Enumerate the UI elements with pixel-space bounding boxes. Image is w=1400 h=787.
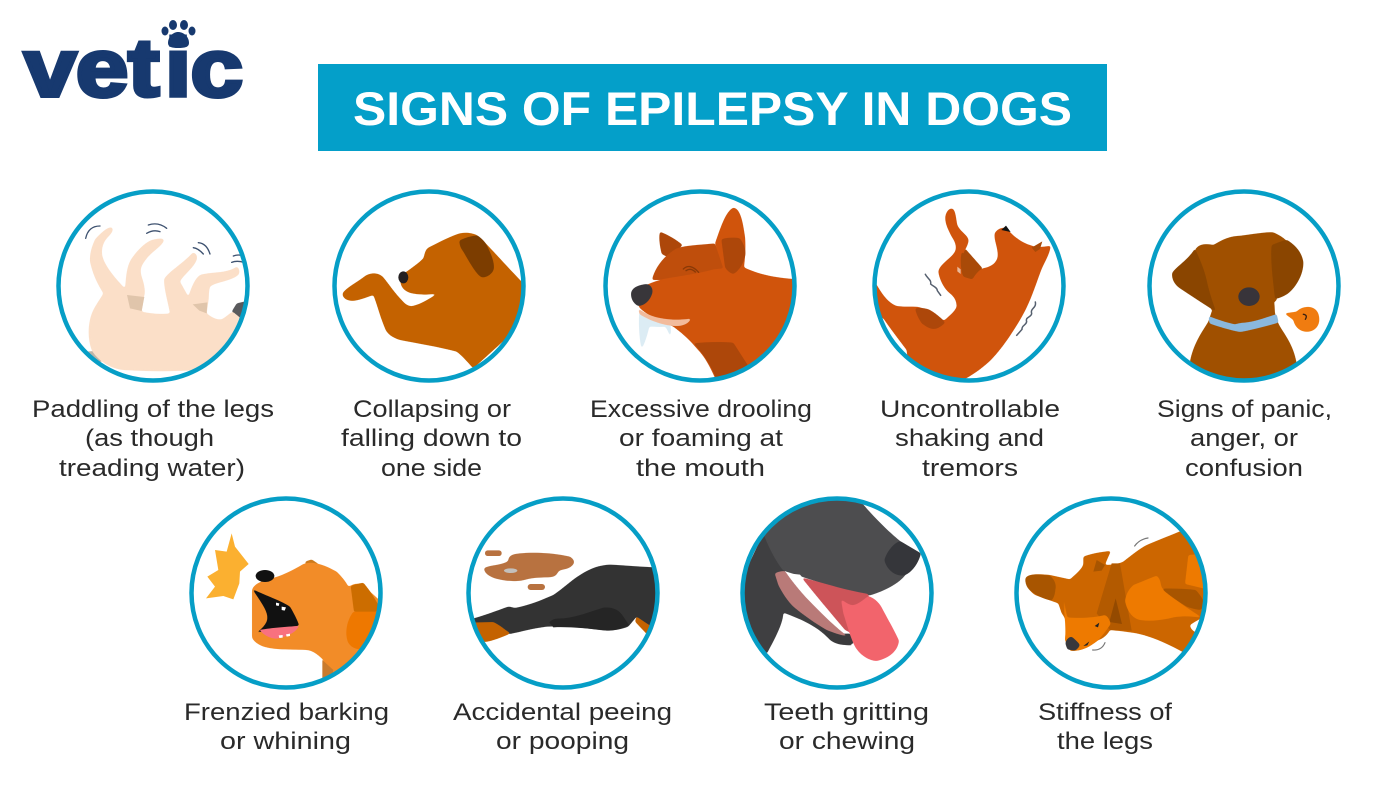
icon: barking dog xyxy=(206,533,387,687)
ring xyxy=(1016,498,1206,688)
caption: falling down to xyxy=(341,425,522,452)
title banner xyxy=(318,64,1107,151)
caption: confusion xyxy=(1185,455,1303,482)
panel: drooling xyxy=(590,192,812,482)
icon: stiff dog lying down xyxy=(1025,531,1210,652)
icon: dog with tongue out xyxy=(737,498,921,661)
caption: Collapsing or xyxy=(353,396,511,423)
caption xyxy=(590,396,812,482)
caption: (as though xyxy=(85,425,214,452)
caption: the legs xyxy=(1057,728,1153,755)
caption xyxy=(341,396,522,482)
caption: one side xyxy=(381,455,482,482)
ring xyxy=(874,192,1064,380)
caption: anger, or xyxy=(1190,425,1298,452)
caption: Frenzied barking xyxy=(184,699,389,726)
caption: tremors xyxy=(922,455,1018,482)
icon: collapsing dog xyxy=(343,233,527,368)
caption: Teeth gritting xyxy=(764,699,929,726)
icon: confused dog with speech bubble xyxy=(1172,232,1319,387)
panel: teeth gritting xyxy=(737,498,932,755)
caption: treading water) xyxy=(59,455,245,482)
ring xyxy=(1150,192,1338,380)
caption: Excessive drooling xyxy=(590,396,812,423)
caption: Signs of panic, xyxy=(1157,396,1332,423)
ring xyxy=(742,498,932,688)
caption xyxy=(1157,396,1332,482)
caption: shaking and xyxy=(895,425,1044,452)
ring xyxy=(58,192,248,380)
ring xyxy=(468,498,658,688)
caption xyxy=(1038,699,1172,755)
caption: Paddling of the legs xyxy=(32,396,274,423)
caption: or whining xyxy=(220,728,351,755)
panel: panic, anger, confusion xyxy=(1150,192,1338,482)
panel: accidental peeing or pooping xyxy=(453,498,672,755)
logo: vetic: vetic xyxy=(24,22,243,114)
panel: collapsing xyxy=(334,192,527,482)
ring xyxy=(192,498,380,688)
caption xyxy=(764,699,929,755)
caption xyxy=(453,699,672,755)
icon: dog lying with puddle xyxy=(470,550,660,642)
icon: drooling dog xyxy=(631,208,800,380)
caption: Stiffness of xyxy=(1038,699,1172,726)
panel: frenzied barking xyxy=(184,498,389,755)
caption xyxy=(184,699,389,755)
panel: paddling of the legs xyxy=(32,192,274,482)
ring xyxy=(334,192,524,380)
icon: speech bubble xyxy=(1284,307,1319,332)
caption xyxy=(880,396,1060,482)
caption: or chewing xyxy=(779,728,915,755)
icon: shaking dog xyxy=(873,209,1051,383)
caption: Accidental peeing xyxy=(453,699,672,726)
caption: Uncontrollable xyxy=(880,396,1060,423)
icon: paw print xyxy=(162,20,196,48)
caption xyxy=(32,396,274,482)
title banner: SIGNS OF EPILEPSY IN DOGS xyxy=(353,82,1072,135)
caption: or foaming at xyxy=(619,425,783,452)
icon: dog on its back paddling xyxy=(85,224,248,371)
ring xyxy=(606,192,794,380)
panel: shaking and tremors xyxy=(873,192,1064,482)
panel: stiffness of the legs xyxy=(1016,498,1210,755)
caption: or pooping xyxy=(496,728,629,755)
caption: the mouth xyxy=(636,455,765,482)
